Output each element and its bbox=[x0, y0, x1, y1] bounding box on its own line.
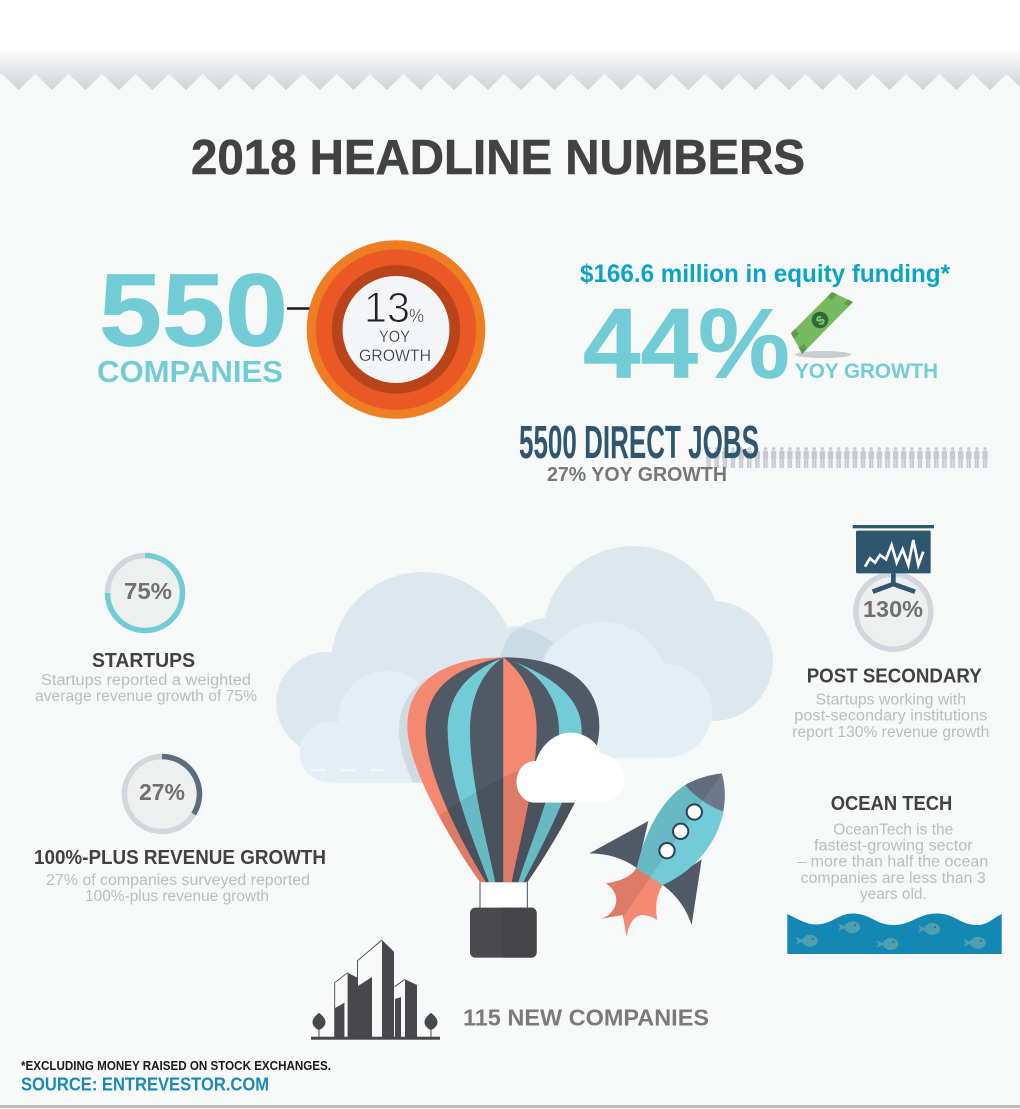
jobs growth: 27% YOY GROWTH bbox=[547, 464, 727, 486]
illustration: hot-air balloon bbox=[399, 657, 603, 958]
post secondary text bbox=[792, 691, 989, 741]
ring badge: 13 bbox=[364, 284, 410, 332]
illustration: rocket bbox=[587, 773, 725, 940]
source: SOURCE: ENTREVESTOR.COM bbox=[21, 1075, 269, 1095]
donut 75% bbox=[108, 556, 182, 630]
footnote: *EXCLUDING MONEY RAISED ON STOCK EXCHANGES. bbox=[21, 1059, 331, 1073]
bottom rule bbox=[0, 1105, 1020, 1108]
panel: ocean tech bbox=[787, 793, 1002, 954]
post secondary text: report 130% revenue growth bbox=[792, 724, 989, 741]
revenue growth text: 100%-plus revenue growth bbox=[85, 888, 269, 905]
icon: small white cloud bbox=[516, 733, 624, 803]
illustration: clouds bbox=[276, 546, 773, 783]
icon: city buildings bbox=[311, 940, 440, 1040]
panel: post secondary bbox=[792, 525, 989, 741]
startups text bbox=[35, 672, 257, 705]
people row bbox=[705, 447, 990, 468]
revenue growth heading: 100%-PLUS REVENUE GROWTH bbox=[34, 847, 326, 869]
title: 2018 HEADLINE NUMBERS bbox=[191, 130, 805, 185]
ocean tech text bbox=[797, 821, 988, 903]
panel: equity funding bbox=[580, 260, 950, 398]
ocean tech text: years old. bbox=[860, 886, 927, 903]
post secondary text: Startups working with bbox=[816, 691, 966, 708]
panel: new companies bbox=[311, 940, 709, 1040]
revenue growth text: 27% of companies surveyed reported bbox=[46, 872, 310, 889]
donut 75%: 75% bbox=[124, 578, 172, 604]
ocean tech heading: OCEAN TECH bbox=[831, 793, 952, 815]
startups text: Startups reported a weighted bbox=[41, 672, 251, 689]
revenue growth text bbox=[46, 872, 310, 905]
post secondary heading: POST SECONDARY bbox=[807, 665, 982, 687]
panel: direct jobs bbox=[519, 416, 990, 486]
jobs heading: 5500 DIRECT JOBS bbox=[519, 416, 759, 468]
panel: startups bbox=[35, 556, 257, 705]
ring badge: % bbox=[409, 306, 424, 326]
startups heading: STARTUPS bbox=[92, 650, 195, 672]
ring badge bbox=[307, 240, 485, 419]
new companies label: 115 NEW COMPANIES bbox=[463, 1005, 709, 1031]
panel: 100%-plus revenue growth bbox=[34, 756, 326, 905]
ocean tech text: – more than half the ocean bbox=[797, 854, 988, 871]
ring badge: YOY bbox=[379, 328, 410, 346]
post secondary text: post-secondary institutions bbox=[794, 708, 988, 725]
ocean tech text: companies are less than 3 bbox=[801, 870, 986, 887]
funding heading: $166.6 million in equity funding* bbox=[580, 260, 950, 288]
ocean tech text: fastest-growing sector bbox=[814, 837, 973, 854]
icon: water with fish bbox=[787, 914, 1002, 954]
yoy growth label: YOY GROWTH bbox=[795, 360, 938, 383]
header torn edge bbox=[0, 0, 1020, 120]
big number 550: 550 bbox=[99, 252, 288, 368]
donut 130% bbox=[856, 574, 931, 649]
panel: 550 companies bbox=[97, 240, 485, 419]
icon: presentation board bbox=[853, 525, 934, 592]
big number 44%: 44% bbox=[583, 288, 790, 398]
130% value: 130% bbox=[863, 596, 923, 622]
companies label: COMPANIES bbox=[97, 354, 283, 389]
icon: dollar bill: $ bbox=[813, 312, 828, 329]
donut 27% bbox=[124, 756, 200, 832]
donut 27%: 27% bbox=[139, 779, 185, 805]
connector line bbox=[287, 307, 310, 310]
ring badge: GROWTH bbox=[359, 347, 431, 365]
ocean tech text: OceanTech is the bbox=[833, 821, 953, 838]
startups text: average revenue growth of 75% bbox=[35, 688, 257, 705]
icon: dollar bill bbox=[791, 292, 853, 358]
